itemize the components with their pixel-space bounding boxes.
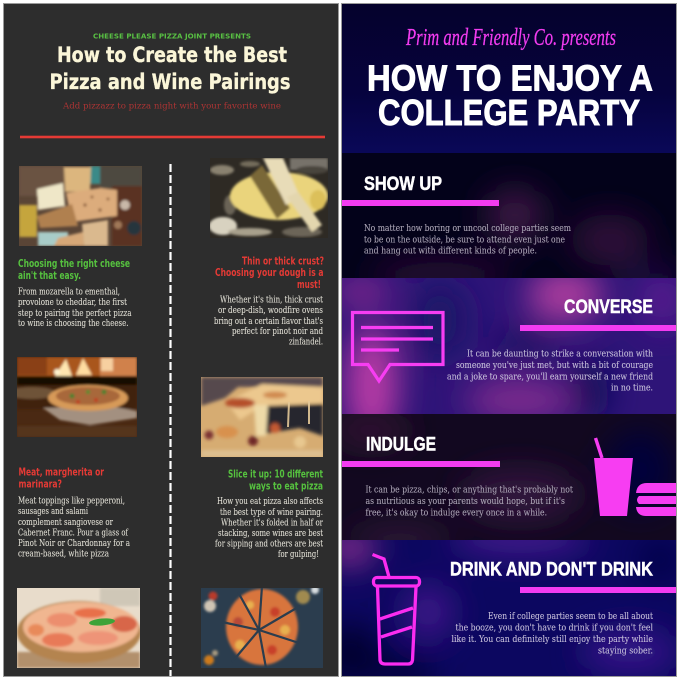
section: converse — [342, 278, 676, 414]
block: slice it up: the best type of wine pairing. — [220, 508, 323, 518]
body text: someone you've just met, but with a bit of courage — [456, 361, 653, 371]
photo: cheese blocks — [19, 166, 142, 246]
block: slice it up: stacking, some wines are best — [218, 529, 323, 539]
block: meat, margherita or marinara: marinara? — [18, 480, 62, 491]
body text: in no time. — [611, 384, 653, 394]
heading: SHOW UP — [364, 174, 442, 195]
photo: pizza in wood oven — [17, 357, 137, 437]
block: thin or thick crust: Choosing your dough is a — [215, 268, 324, 279]
heading: INDULGE — [366, 435, 436, 456]
heading: DRINK AND DON'T DRINK — [450, 560, 653, 581]
icon: soft drink — [594, 438, 633, 516]
block: meat, margherita or marinara: Pinot Noir or Chardonnay for a — [18, 539, 130, 549]
block: thin or thick crust: or deep-dish, woodfire ovens — [218, 306, 323, 316]
icon: burger — [636, 483, 676, 516]
title: pizza and wine: Pizza and Wine Pairings — [50, 70, 290, 94]
block: slice it up: for sipping and others are best — [215, 540, 323, 550]
body text: It can be daunting to strike a conversation with — [467, 350, 653, 360]
body text — [452, 612, 653, 656]
block: thin or thick crust: must! — [297, 280, 321, 291]
body text: Even if college parties seem to be all about — [488, 612, 653, 622]
block: thin or thick crust: bring out a certain flavor that's — [214, 317, 323, 327]
bar — [520, 587, 676, 593]
photo: cheesy pizza slice — [201, 377, 323, 457]
block: meat, margherita or marinara: complement sangiovese or — [18, 518, 114, 528]
photo: sliced pizza from above — [201, 588, 323, 668]
block: meat, margherita or marinara: Meat, margherita or — [18, 468, 104, 479]
dashed centre divider — [169, 164, 172, 676]
block: slice it up: for gulping! — [278, 550, 319, 560]
block: meat, margherita or marinara: Cabernet Franc. Pour a glass of — [18, 528, 129, 538]
icon: speech bubble — [352, 312, 443, 381]
body text: and hang out with different kinds of people. — [364, 247, 537, 257]
title: college party: HOW TO ENJOY A — [367, 58, 653, 99]
block: slice it up: Whether it's folded in half or — [221, 518, 324, 528]
block: choosing the right cheese: Choosing the right cheese — [18, 259, 130, 270]
block: choosing the right cheese: From mozarella to ementhal, — [18, 288, 120, 298]
body text — [447, 350, 653, 394]
block: choosing the right cheese: to wine is choosing the cheese. — [18, 319, 128, 329]
title: college party: COLLEGE PARTY — [378, 92, 640, 133]
block: choosing the right cheese — [18, 259, 132, 329]
panel: pizza and wine pairings — [4, 4, 338, 676]
section: indulge — [342, 414, 676, 540]
subtitle: Add pizzazz to pizza night with your favorite wine — [62, 100, 281, 110]
block: thin or thick crust — [214, 256, 324, 348]
photo: pepperoni pizza with basil — [17, 588, 140, 668]
body text: to be on the outside, be sure to attend even just one — [364, 236, 565, 246]
red divider — [20, 136, 325, 138]
block: meat, margherita or marinara: cream-based, white pizza — [18, 550, 109, 560]
block: meat, margherita or marinara: sausages and salami — [18, 507, 88, 517]
block: slice it up — [215, 470, 324, 560]
bar — [520, 325, 676, 331]
block: slice it up: ways to eat pizza — [249, 482, 323, 493]
block: meat, margherita or marinara — [18, 468, 130, 560]
panel: how to enjoy a college party — [320, 4, 680, 680]
section: drink and don't drink — [342, 540, 676, 676]
block: choosing the right cheese: ain't that easy. — [18, 271, 81, 282]
body text: It can be pizza, chips, or anything that's probably not — [366, 486, 573, 496]
block: meat, margherita or marinara: Meat toppings like pepperoni, — [18, 497, 125, 507]
title: college party — [367, 58, 653, 133]
body text: staying sober. — [598, 646, 653, 656]
photo: dough and rolling pin — [210, 158, 328, 238]
block: thin or thick crust: Whether it's thin, thick crust — [220, 296, 323, 306]
block: slice it up: How you eat pizza also affects — [217, 497, 323, 507]
title: pizza and wine: How to Create the Best — [57, 43, 287, 67]
block: slice it up: Slice it up: 10 different — [228, 470, 323, 481]
title: pizza and wine — [50, 43, 290, 94]
eyebrow: cheese please pizza joint presents: CHEESE PLEASE PIZZA JOINT PRESENTS — [93, 32, 251, 40]
block: thin or thick crust: Thin or thick crust? — [242, 256, 324, 268]
header background — [342, 4, 676, 153]
body text: the booze, you don't have to drink if you don't feel — [456, 624, 653, 634]
block: choosing the right cheese: provolone to cheddar, the first — [18, 298, 127, 308]
body text: as nutritious as your parents would hope, but if it's — [366, 497, 565, 507]
block: choosing the right cheese: step to pairing the perfect pizza — [18, 309, 132, 319]
section: show up — [342, 153, 676, 278]
bar — [342, 200, 499, 206]
body text: and a joke to spare, you'll earn yourself a new friend — [447, 372, 653, 382]
body text: No matter how boring or uncool college parties seem — [364, 224, 571, 234]
block: thin or thick crust: zinfandel. — [289, 338, 323, 348]
body text — [364, 224, 571, 257]
heading: CONVERSE — [564, 297, 653, 318]
icon: takeaway cup — [372, 554, 420, 664]
body text — [366, 486, 573, 518]
body text: free, it's okay to indulge every once in a while. — [366, 508, 547, 518]
bar — [342, 461, 500, 467]
block: thin or thick crust: perfect for pinot noir and — [232, 327, 323, 337]
body text: like it. You can definitely still enjoy the party while — [452, 635, 653, 645]
